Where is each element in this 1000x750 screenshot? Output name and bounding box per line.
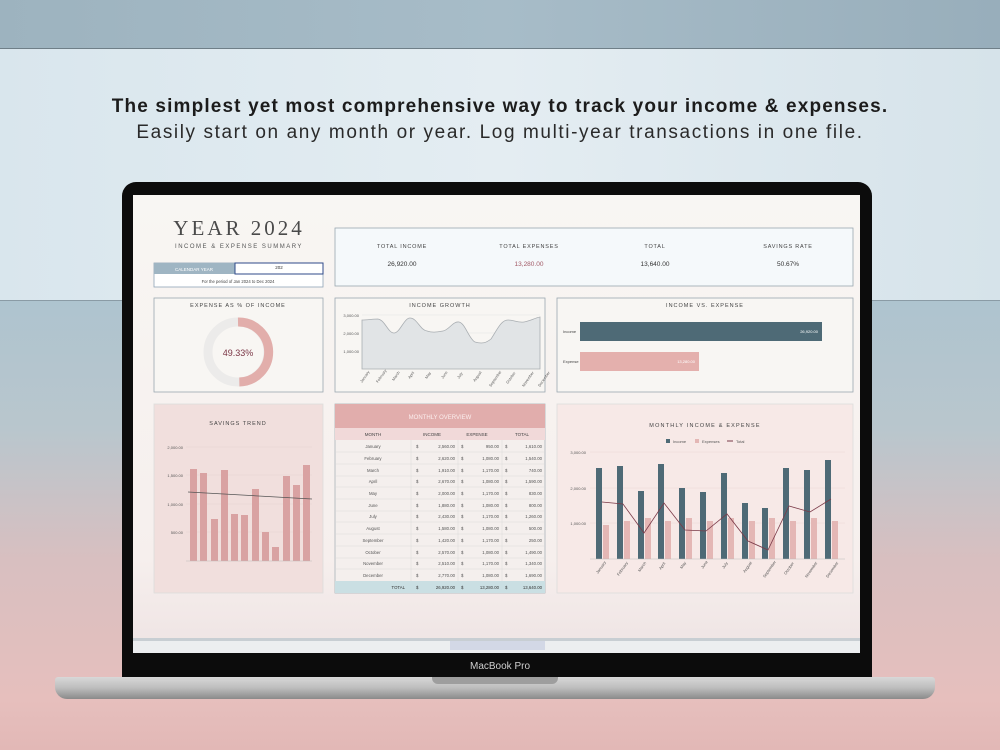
panel: monthly overview table: 1,170.00: [482, 491, 500, 496]
panel: income growth chart: INCOME GROWTH: [409, 303, 471, 309]
panel: income growth chart: February: [376, 369, 388, 384]
panel: monthly overview table: 740.00: [529, 468, 543, 473]
panel: monthly overview table: May: [369, 491, 378, 496]
headline: The simplest yet most comprehensive way to track your income & expenses.: [112, 96, 888, 117]
panel: monthly overview table: $: [505, 514, 508, 519]
panel: savings trend: 500.00: [171, 530, 184, 535]
panel: monthly income & expense chart: May: [679, 561, 687, 570]
panel: income growth chart: March: [392, 371, 401, 382]
panel: KPI summary: [335, 228, 853, 286]
panel: monthly overview table: 1,080.00: [482, 550, 500, 555]
panel: monthly overview table: $: [505, 561, 508, 566]
panel: savings trend: SAVINGS TREND: [209, 421, 267, 427]
label: MacBook Pro: MacBook Pro: [470, 661, 530, 672]
panel: monthly overview table: $: [461, 491, 464, 496]
panel: monthly income & expense chart: 1,000.00: [570, 521, 587, 526]
panel: monthly overview table: $: [505, 573, 508, 578]
panel: monthly overview table: 2,560.00: [438, 444, 456, 449]
panel: monthly overview table: 13,280.00: [480, 585, 500, 590]
panel: income growth chart: October: [506, 371, 517, 385]
panel: expense as % of income: 49.33%: [223, 348, 253, 358]
panel: monthly overview table: $: [505, 468, 508, 473]
panel: monthly overview table: $: [416, 514, 419, 519]
panel: monthly income & expense chart: January: [595, 560, 607, 575]
panel: monthly income & expense chart: [557, 404, 853, 593]
panel: monthly overview table: $: [505, 550, 508, 555]
panel: monthly income & expense chart: April: [658, 561, 666, 571]
panel: monthly income & expense chart: June: [700, 559, 709, 570]
panel: monthly income & expense chart: November: [804, 560, 819, 579]
title: YEAR 2024: INCOME & EXPENSE SUMMARY: [175, 244, 303, 250]
panel: income vs expense: [557, 298, 853, 392]
panel: monthly overview table: TOTAL: [515, 432, 530, 437]
panel: monthly overview table: $: [505, 503, 508, 508]
panel: KPI summary: TOTAL EXPENSES: [499, 244, 559, 250]
panel: monthly overview table: 1,080.00: [482, 573, 500, 578]
panel: monthly income & expense chart: September: [762, 559, 777, 579]
panel: KPI summary: 50.67%: [777, 261, 799, 268]
panel: monthly overview table: $: [461, 514, 464, 519]
panel: monthly overview table: $: [416, 503, 419, 508]
panel: monthly overview table: 1,080.00: [482, 456, 500, 461]
screen: [133, 195, 860, 650]
panel: monthly overview table: $: [416, 444, 419, 449]
panel: monthly income & expense chart: Income: [673, 439, 687, 444]
panel: monthly overview table: $: [416, 538, 419, 543]
panel: monthly overview table: $: [461, 550, 464, 555]
panel: monthly overview table: 26,920.00: [436, 585, 456, 590]
panel: monthly overview table: 2,620.00: [438, 456, 456, 461]
panel: income growth chart: June: [441, 371, 449, 380]
panel: monthly overview table: $: [505, 491, 508, 496]
panel: monthly overview table: 2,770.00: [438, 573, 456, 578]
panel: monthly overview table: $: [461, 479, 464, 484]
calendar year box: 202: [275, 265, 283, 270]
panel: monthly overview table: $: [416, 479, 419, 484]
panel: monthly overview table: 2,570.00: [438, 550, 456, 555]
panel: monthly overview table: July: [369, 514, 378, 519]
panel: monthly overview table: December: [363, 573, 383, 578]
panel: monthly income & expense chart: March: [637, 561, 647, 573]
panel: monthly overview table: TOTAL: [392, 585, 406, 590]
panel: monthly overview table: $: [505, 585, 508, 590]
panel: income vs expense: Expense: [563, 359, 579, 364]
panel: monthly overview table: 950.00: [486, 444, 500, 449]
panel: monthly overview table: March: [367, 468, 380, 473]
panel: KPI summary: 13,640.00: [641, 261, 670, 268]
panel: monthly overview table: August: [366, 526, 380, 531]
panel: KPI summary: TOTAL: [644, 244, 666, 250]
panel: expense as % of income: [154, 298, 323, 392]
panel: monthly overview table: $: [416, 491, 419, 496]
panel: monthly overview table: 1,880.00: [438, 503, 456, 508]
panel: expense as % of income: EXPENSE AS % OF INCOME: [190, 303, 286, 309]
panel: monthly overview table: $: [461, 444, 464, 449]
panel: monthly overview table: $: [461, 573, 464, 578]
calendar year box: For the period of Jan 2024 to Dec 2024: [202, 279, 275, 284]
laptop base: [55, 677, 935, 699]
panel: monthly overview table: 2,510.00: [438, 561, 456, 566]
panel: monthly income & expense chart: Expenses: [702, 439, 720, 444]
panel: income growth chart: August: [473, 370, 483, 383]
panel: monthly income & expense chart: 2,000.00: [570, 486, 587, 491]
panel: monthly overview table: 1,610.00: [525, 444, 543, 449]
panel: monthly overview table: $: [461, 468, 464, 473]
panel: monthly overview table: 1,340.00: [525, 561, 543, 566]
panel: savings trend: [154, 404, 323, 593]
panel: KPI summary: 13,280.00: [515, 261, 544, 268]
panel: savings trend: 1,000.00: [167, 502, 184, 507]
panel: monthly income & expense chart: MONTHLY INCOME & EXPENSE: [649, 423, 761, 429]
panel: KPI summary: 26,920.00: [388, 261, 417, 268]
panel: monthly overview table: $: [416, 585, 419, 590]
panel: monthly overview table: 1,170.00: [482, 468, 500, 473]
panel: monthly overview table: MONTH: [365, 432, 381, 437]
panel: KPI summary: SAVINGS RATE: [763, 244, 813, 250]
panel: KPI summary: TOTAL INCOME: [377, 244, 427, 250]
panel: monthly overview table: 1,080.00: [482, 479, 500, 484]
panel: monthly income & expense chart: August: [742, 560, 753, 574]
calendar year box: [154, 263, 323, 287]
panel: monthly overview table: MONTHLY OVERVIEW: [409, 415, 472, 421]
panel: monthly overview table: 1,260.00: [525, 514, 543, 519]
panel: monthly overview table: June: [368, 503, 378, 508]
panel: monthly overview table: 2,430.00: [438, 514, 456, 519]
panel: monthly overview table: 1,080.00: [482, 503, 500, 508]
panel: monthly overview table: 1,420.00: [438, 538, 456, 543]
panel: monthly overview table: October: [365, 550, 381, 555]
laptop bezel: [122, 182, 872, 680]
panel: monthly overview table: 2,670.00: [438, 479, 456, 484]
panel: monthly overview table: 1,580.00: [438, 526, 456, 531]
panel: monthly income & expense chart: October: [783, 561, 795, 576]
panel: income growth chart: November: [522, 370, 535, 388]
calendar year box: CALENDAR YEAR: [175, 267, 214, 272]
panel: monthly overview table: $: [505, 479, 508, 484]
panel: monthly overview table: $: [416, 456, 419, 461]
panel: income vs expense: 26,920.00: [800, 329, 819, 334]
panel: monthly overview table: $: [505, 538, 508, 543]
panel: monthly overview table: $: [461, 503, 464, 508]
panel: savings trend: 2,000.00: [167, 445, 184, 450]
panel: income vs expense: Income: [563, 329, 577, 334]
panel: monthly overview table: 1,490.00: [525, 550, 543, 555]
panel: monthly overview table: $: [416, 468, 419, 473]
panel: monthly overview table: 1,910.00: [438, 468, 456, 473]
subheadline: Easily start on any month or year. Log multi-year transactions in one file.: [136, 122, 864, 143]
panel: monthly overview table: 1,170.00: [482, 561, 500, 566]
panel: monthly overview table: [335, 404, 545, 593]
panel: monthly income & expense chart: December: [825, 560, 840, 579]
panel: monthly overview table: 800.00: [529, 503, 543, 508]
panel: monthly overview table: 250.00: [529, 538, 543, 543]
panel: monthly overview table: $: [461, 526, 464, 531]
panel: monthly overview table: 1,170.00: [482, 538, 500, 543]
panel: income vs expense: INCOME VS. EXPENSE: [666, 303, 744, 309]
panel: monthly overview table: 13,640.00: [523, 585, 543, 590]
panel: monthly overview table: September: [362, 538, 384, 543]
panel: income growth chart: 2,000.00: [343, 331, 360, 336]
panel: income growth chart: January: [360, 370, 371, 384]
panel: monthly income & expense chart: 3,000.00: [570, 450, 587, 455]
panel: monthly income & expense chart: Total: [736, 439, 745, 444]
panel: monthly income & expense chart: July: [721, 561, 729, 570]
panel: monthly overview table: January: [365, 444, 381, 449]
panel: income growth chart: 3,000.00: [343, 313, 360, 318]
panel: monthly overview table: November: [363, 561, 383, 566]
panel: monthly income & expense chart: February: [616, 561, 629, 577]
panel: monthly overview table: $: [416, 526, 419, 531]
panel: monthly overview table: $: [416, 573, 419, 578]
panel: monthly overview table: $: [461, 538, 464, 543]
panel: monthly overview table: 830.00: [529, 491, 543, 496]
panel: income growth chart: 1,000.00: [343, 349, 360, 354]
panel: income growth chart: July: [457, 372, 464, 380]
panel: monthly overview table: $: [505, 456, 508, 461]
panel: income growth chart: [335, 298, 551, 392]
panel: monthly overview table: 2,000.00: [438, 491, 456, 496]
panel: monthly overview table: 1,080.00: [482, 526, 500, 531]
panel: monthly overview table: 1,590.00: [525, 479, 543, 484]
panel: income growth chart: April: [408, 371, 415, 380]
panel: monthly overview table: 1,540.00: [525, 456, 543, 461]
panel: monthly overview table: February: [364, 456, 382, 461]
panel: monthly overview table: $: [416, 550, 419, 555]
title: YEAR 2024: YEAR 2024: [173, 216, 305, 240]
panel: monthly overview table: 1,170.00: [482, 514, 500, 519]
panel: income growth chart: May: [425, 371, 432, 380]
panel: monthly overview table: $: [505, 526, 508, 531]
panel: monthly overview table: $: [461, 456, 464, 461]
panel: monthly overview table: 500.00: [529, 526, 543, 531]
panel: monthly overview table: $: [416, 561, 419, 566]
panel: income vs expense: 13,280.00: [677, 359, 696, 364]
panel: income growth chart: September: [489, 369, 503, 388]
panel: monthly overview table: EXPENSE: [466, 432, 488, 437]
panel: monthly overview table: April: [369, 479, 377, 484]
panel: monthly overview table: 1,690.00: [525, 573, 543, 578]
panel: savings trend: 1,500.00: [167, 473, 184, 478]
panel: monthly overview table: $: [505, 444, 508, 449]
panel: monthly overview table: INCOME: [423, 432, 441, 437]
panel: income growth chart: December: [538, 370, 551, 388]
panel: monthly overview table: $: [461, 561, 464, 566]
panel: monthly overview table: $: [461, 585, 464, 590]
